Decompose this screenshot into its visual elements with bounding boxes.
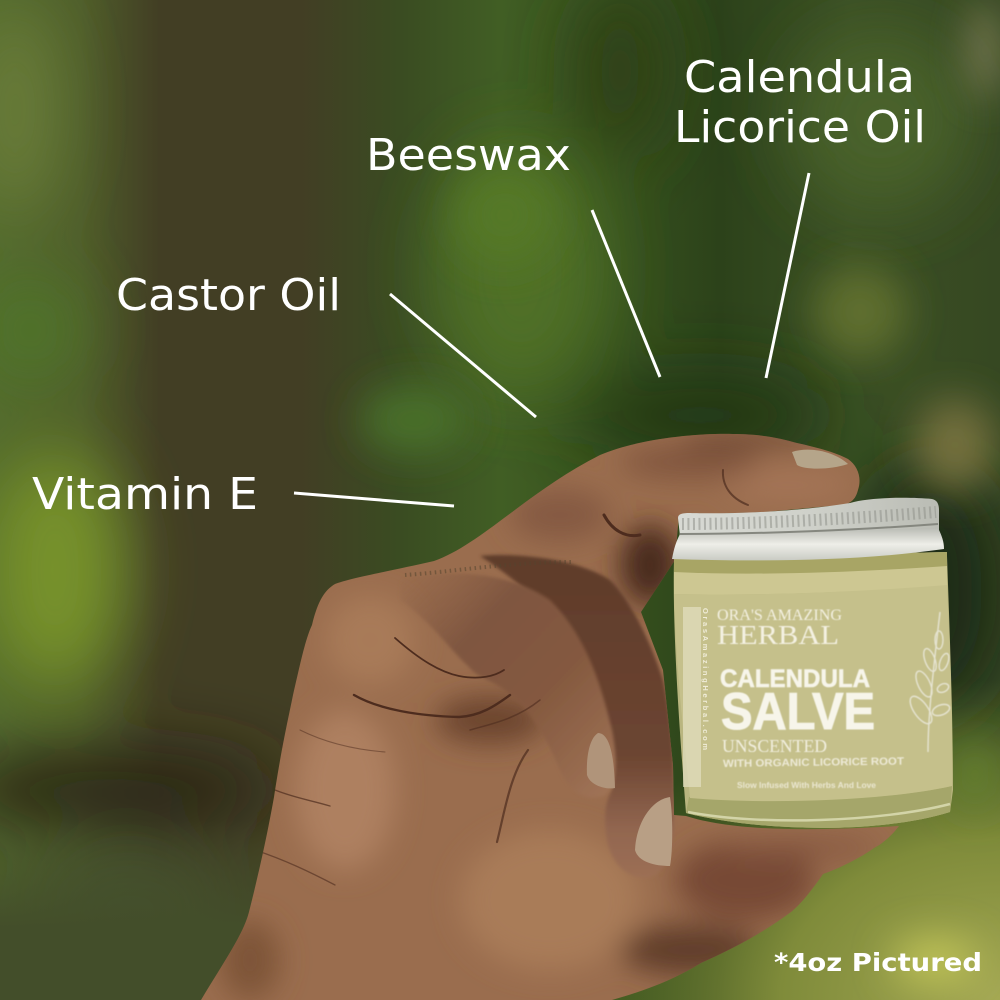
side text strip [683,607,710,787]
product name: CALENDULA [720,665,870,693]
upper salve band [674,552,947,595]
side text strip: OrasAmazingHerbal.com [701,608,710,750]
brand name: ORA'S AMAZING [717,607,842,624]
footnote: *4oz Pictured [774,948,982,977]
jar [672,498,953,828]
variant [722,736,905,790]
callout: Vitamin E [32,469,454,520]
knuckle hair [405,562,572,575]
variant: WITH ORGANIC LICORICE ROOT [723,755,905,770]
icon: herb sprig [906,612,951,752]
callout: Beeswax: Beeswax [366,130,571,181]
callout: Beeswax [366,130,660,377]
hand holding jar [201,434,899,1000]
brand name [717,607,842,650]
callout: Castor Oil [116,270,536,417]
brand name: HERBAL [717,620,839,650]
callout: Calendula Licorice Oil: Licorice Oil [674,102,926,153]
callout: Calendula Licorice Oil: Calendula [684,52,915,103]
jar glass body [674,556,953,828]
lower glass [686,786,952,828]
variant: UNSCENTED [722,736,827,756]
metal lid [678,498,939,536]
callout: Calendula Licorice Oil [674,52,926,378]
thumb nail [792,450,848,469]
fingernail: ring finger [635,797,672,866]
bottom fades [0,820,330,1000]
palm shading [220,434,880,1000]
fingernail: middle finger [587,733,615,788]
middle finger [414,575,617,778]
callout: Castor Oil: Castor Oil [116,270,341,321]
variant: Slow Infused With Herbs And Love [737,781,877,790]
skin creases [255,470,748,885]
callout: Vitamin E: Vitamin E [32,469,258,520]
label [674,585,952,801]
ring finger [480,555,674,877]
product name: SALVE [721,683,875,741]
